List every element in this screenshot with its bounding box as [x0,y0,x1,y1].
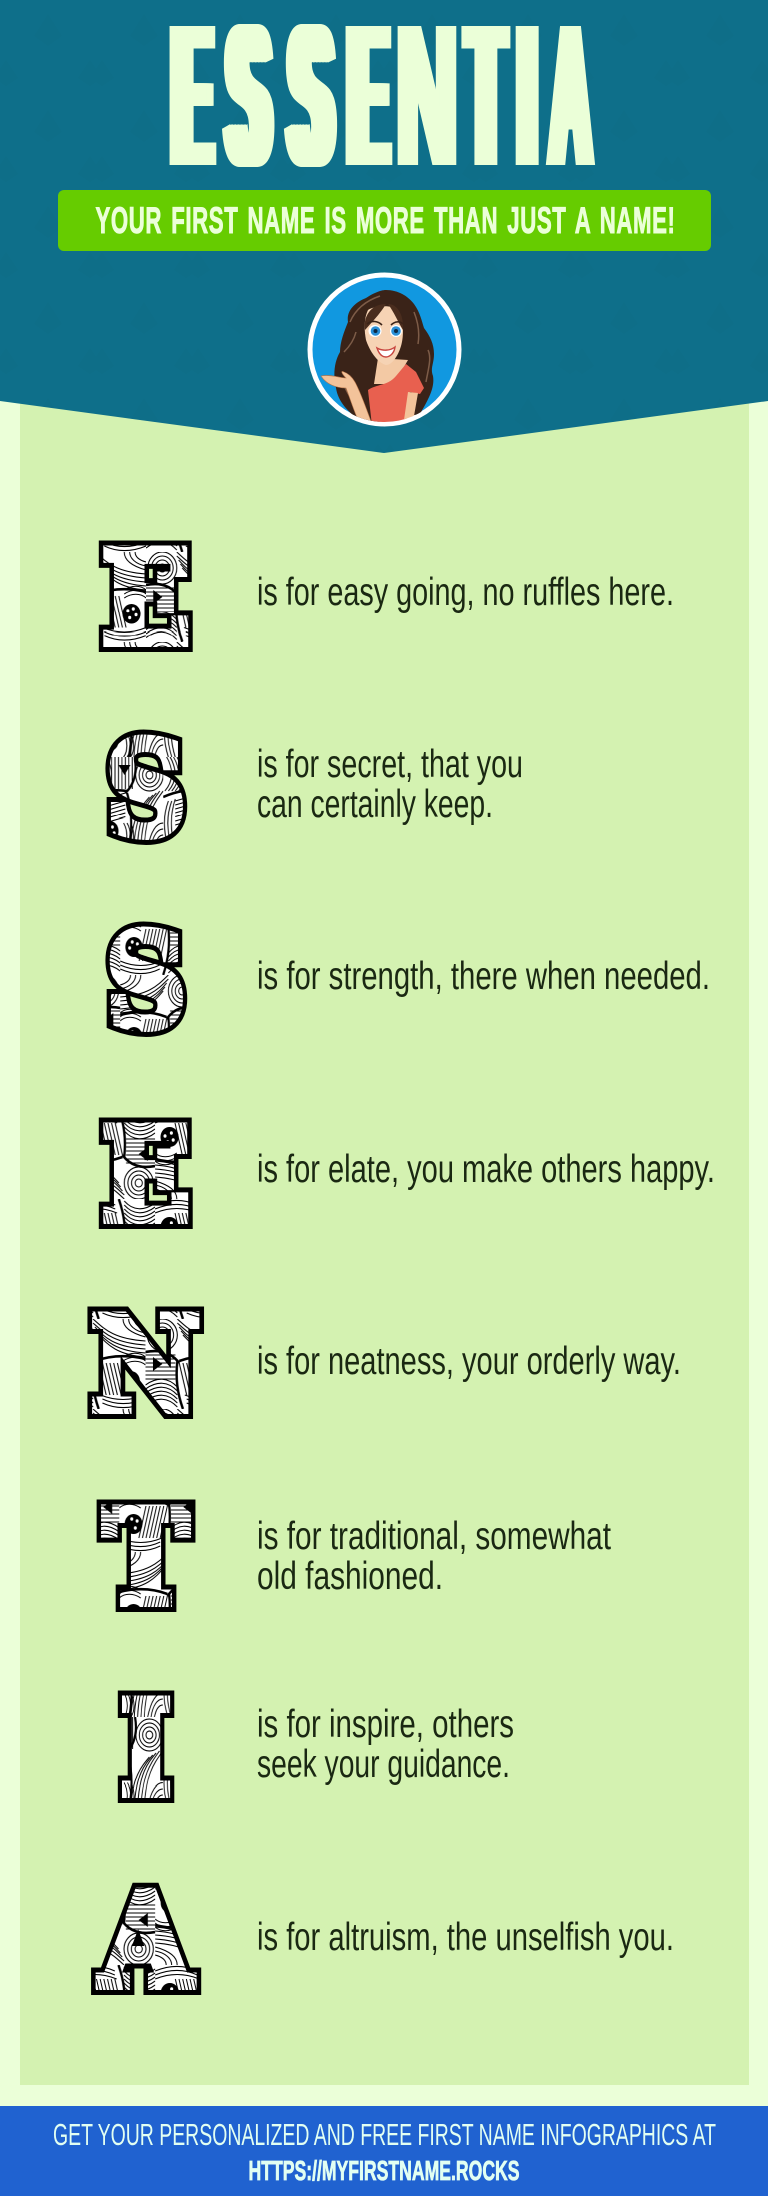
row: N neatness: N [92,1290,199,1439]
row: E easy going: E [102,525,190,672]
row: S strength [107,907,710,1055]
row: A altruism [100,1866,674,2015]
title [170,0,596,208]
row: E elate: E [102,1102,190,1249]
row: T traditional [104,1485,611,1633]
row: S secret: can certainly keep. [257,783,493,826]
row: S secret: S [107,715,185,863]
row: N neatness [92,1290,681,1439]
header background [0,0,768,453]
row: S strength: S [107,907,185,1055]
row: T traditional: T [104,1485,188,1633]
row: E elate [102,1102,715,1249]
letter rows [92,525,715,2015]
row: A altruism: A [100,1866,193,2015]
footer [0,2106,768,2196]
row: E easy going: E [102,525,190,672]
row: T traditional: is for traditional, somewhat [257,1515,611,1558]
panel: letters and descriptions [20,380,749,2085]
footer: HTTPS://MYFIRSTNAME.ROCKS [248,2155,520,2186]
row: S secret [107,715,523,863]
row: T traditional: old fashioned. [257,1555,443,1598]
row: S secret: S [107,715,185,863]
row: S secret: is for secret, that you [257,743,523,786]
row: N neatness: N [92,1290,199,1439]
row: E easy going [102,525,674,672]
row: S strength: S [107,907,185,1055]
row: I inspire: is for inspire, others [257,1703,514,1746]
row: E elate: E [102,1102,190,1249]
row: I inspire: I [121,1676,171,1823]
row: I inspire: seek your guidance. [257,1743,510,1786]
row: I inspire: I [121,1676,171,1823]
row: A altruism: A [100,1866,193,2015]
icon: portrait of woman in circle [310,275,459,426]
subtitle banner [58,190,711,251]
row: T traditional: T [104,1485,188,1633]
row: I inspire [121,1676,514,1823]
